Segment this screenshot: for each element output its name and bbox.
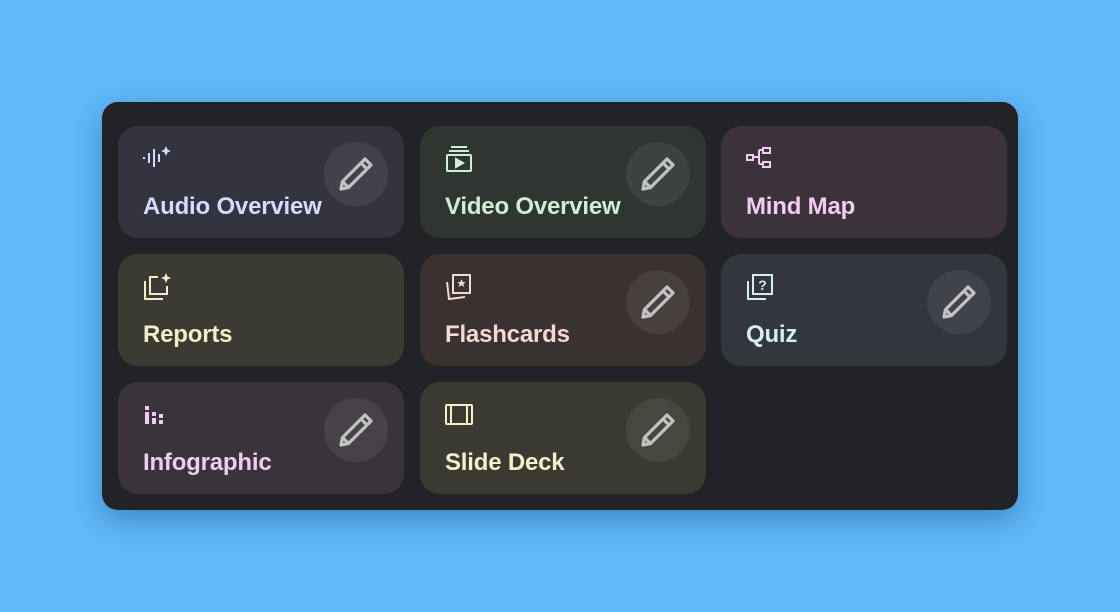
label: Flashcards	[445, 321, 570, 348]
icon: flashcards	[446, 274, 471, 300]
card: audio overview	[118, 126, 404, 238]
icon: mind map	[746, 147, 771, 168]
icon: infographic bars	[145, 406, 163, 424]
card: flashcards	[420, 254, 706, 366]
card: reports	[118, 254, 404, 366]
label: Reports	[143, 321, 232, 348]
icon: quiz: ?	[758, 277, 767, 293]
icon: quiz	[747, 274, 773, 300]
icon: audio waveform	[143, 146, 171, 167]
card: slide deck	[420, 382, 706, 494]
icon: reports	[144, 273, 171, 300]
card: mind map	[721, 126, 1007, 238]
card: quiz	[721, 254, 1007, 366]
icon: video	[446, 146, 472, 172]
card: video overview	[420, 126, 706, 238]
pencil button	[626, 270, 690, 334]
label: Mind Map	[746, 193, 855, 220]
label: Slide Deck	[445, 449, 564, 476]
label: Audio Overview	[143, 193, 322, 220]
pencil button	[324, 142, 388, 206]
label: Infographic	[143, 449, 271, 476]
panel: studio tools	[102, 102, 1018, 510]
pencil button	[626, 142, 690, 206]
pencil button	[626, 398, 690, 462]
card: infographic	[118, 382, 404, 494]
pencil button	[324, 398, 388, 462]
icon: slide deck	[445, 404, 473, 425]
label: Quiz	[746, 321, 797, 348]
pencil button	[927, 270, 991, 334]
label: Video Overview	[445, 193, 621, 220]
